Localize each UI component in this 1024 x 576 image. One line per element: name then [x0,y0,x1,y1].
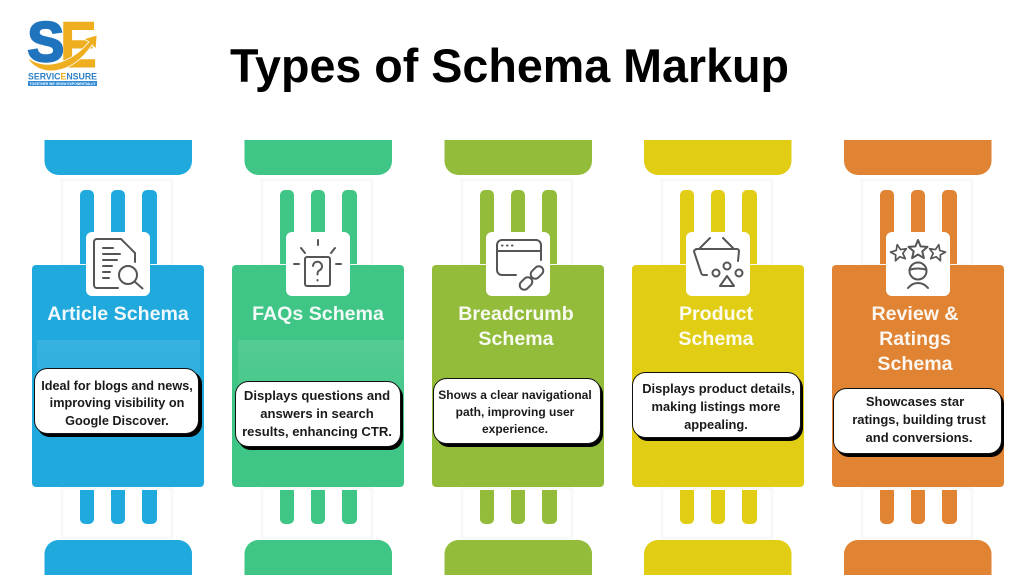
callout: Displays product details, [642,381,795,396]
callout: path, improving user [456,405,575,419]
logo: ServiceNsure: SERVICENSURE [28,72,98,82]
heading: Review & [871,303,959,325]
callout: making listings more [652,399,780,414]
heading: Schema [877,353,954,375]
logo: ServiceNsure: TOGETHER WE GROW EXPONENTIALLY [30,82,96,86]
heading [458,303,574,350]
heading: FAQs Schema [252,303,385,325]
heading: Schema [478,328,555,350]
callout [34,368,202,437]
panel: Article Schema [32,140,204,575]
icon: basket with shapes [686,232,750,296]
logo: ServiceNsure [27,8,98,86]
heading: Breadcrumb [458,303,574,325]
callout: answers in search [260,406,374,421]
heading [871,303,959,375]
callout: improving visibility on [50,396,184,410]
title: Types of Schema Markup [230,40,789,93]
icon: browser window with link [486,232,550,296]
callout: appealing. [684,417,748,432]
callout: Showcases star [866,394,964,409]
callout: results, enhancing CTR. [242,424,392,439]
callout [632,372,803,441]
callout: and conversions. [866,430,972,445]
heading: Schema [678,328,755,350]
icon: document with magnifier [86,232,150,296]
callout [434,378,603,447]
panel: Breadcrumb Schema [432,140,604,575]
panel: Product Schema [632,140,804,575]
callout: Ideal for blogs and news, [41,379,193,393]
callout: Google Discover. [65,414,169,428]
callout [236,382,403,450]
callout: Shows a clear navigational [438,388,592,402]
heading: Product [679,303,753,325]
icon: three stars and person [886,232,950,296]
callout [834,388,1004,457]
callout: experience. [482,422,548,436]
logo: ServiceNsure: E [60,8,97,81]
callout: ratings, building trust [852,412,986,427]
heading: Ratings [879,328,951,350]
icon: question box with rays [286,232,350,296]
panel: FAQs Schema [232,140,404,575]
panel: Review & Ratings Schema [832,140,1004,575]
heading: Article Schema [47,303,190,325]
heading [678,303,755,350]
logo: ServiceNsure: S [28,10,64,73]
callout: Displays questions and [244,388,390,403]
